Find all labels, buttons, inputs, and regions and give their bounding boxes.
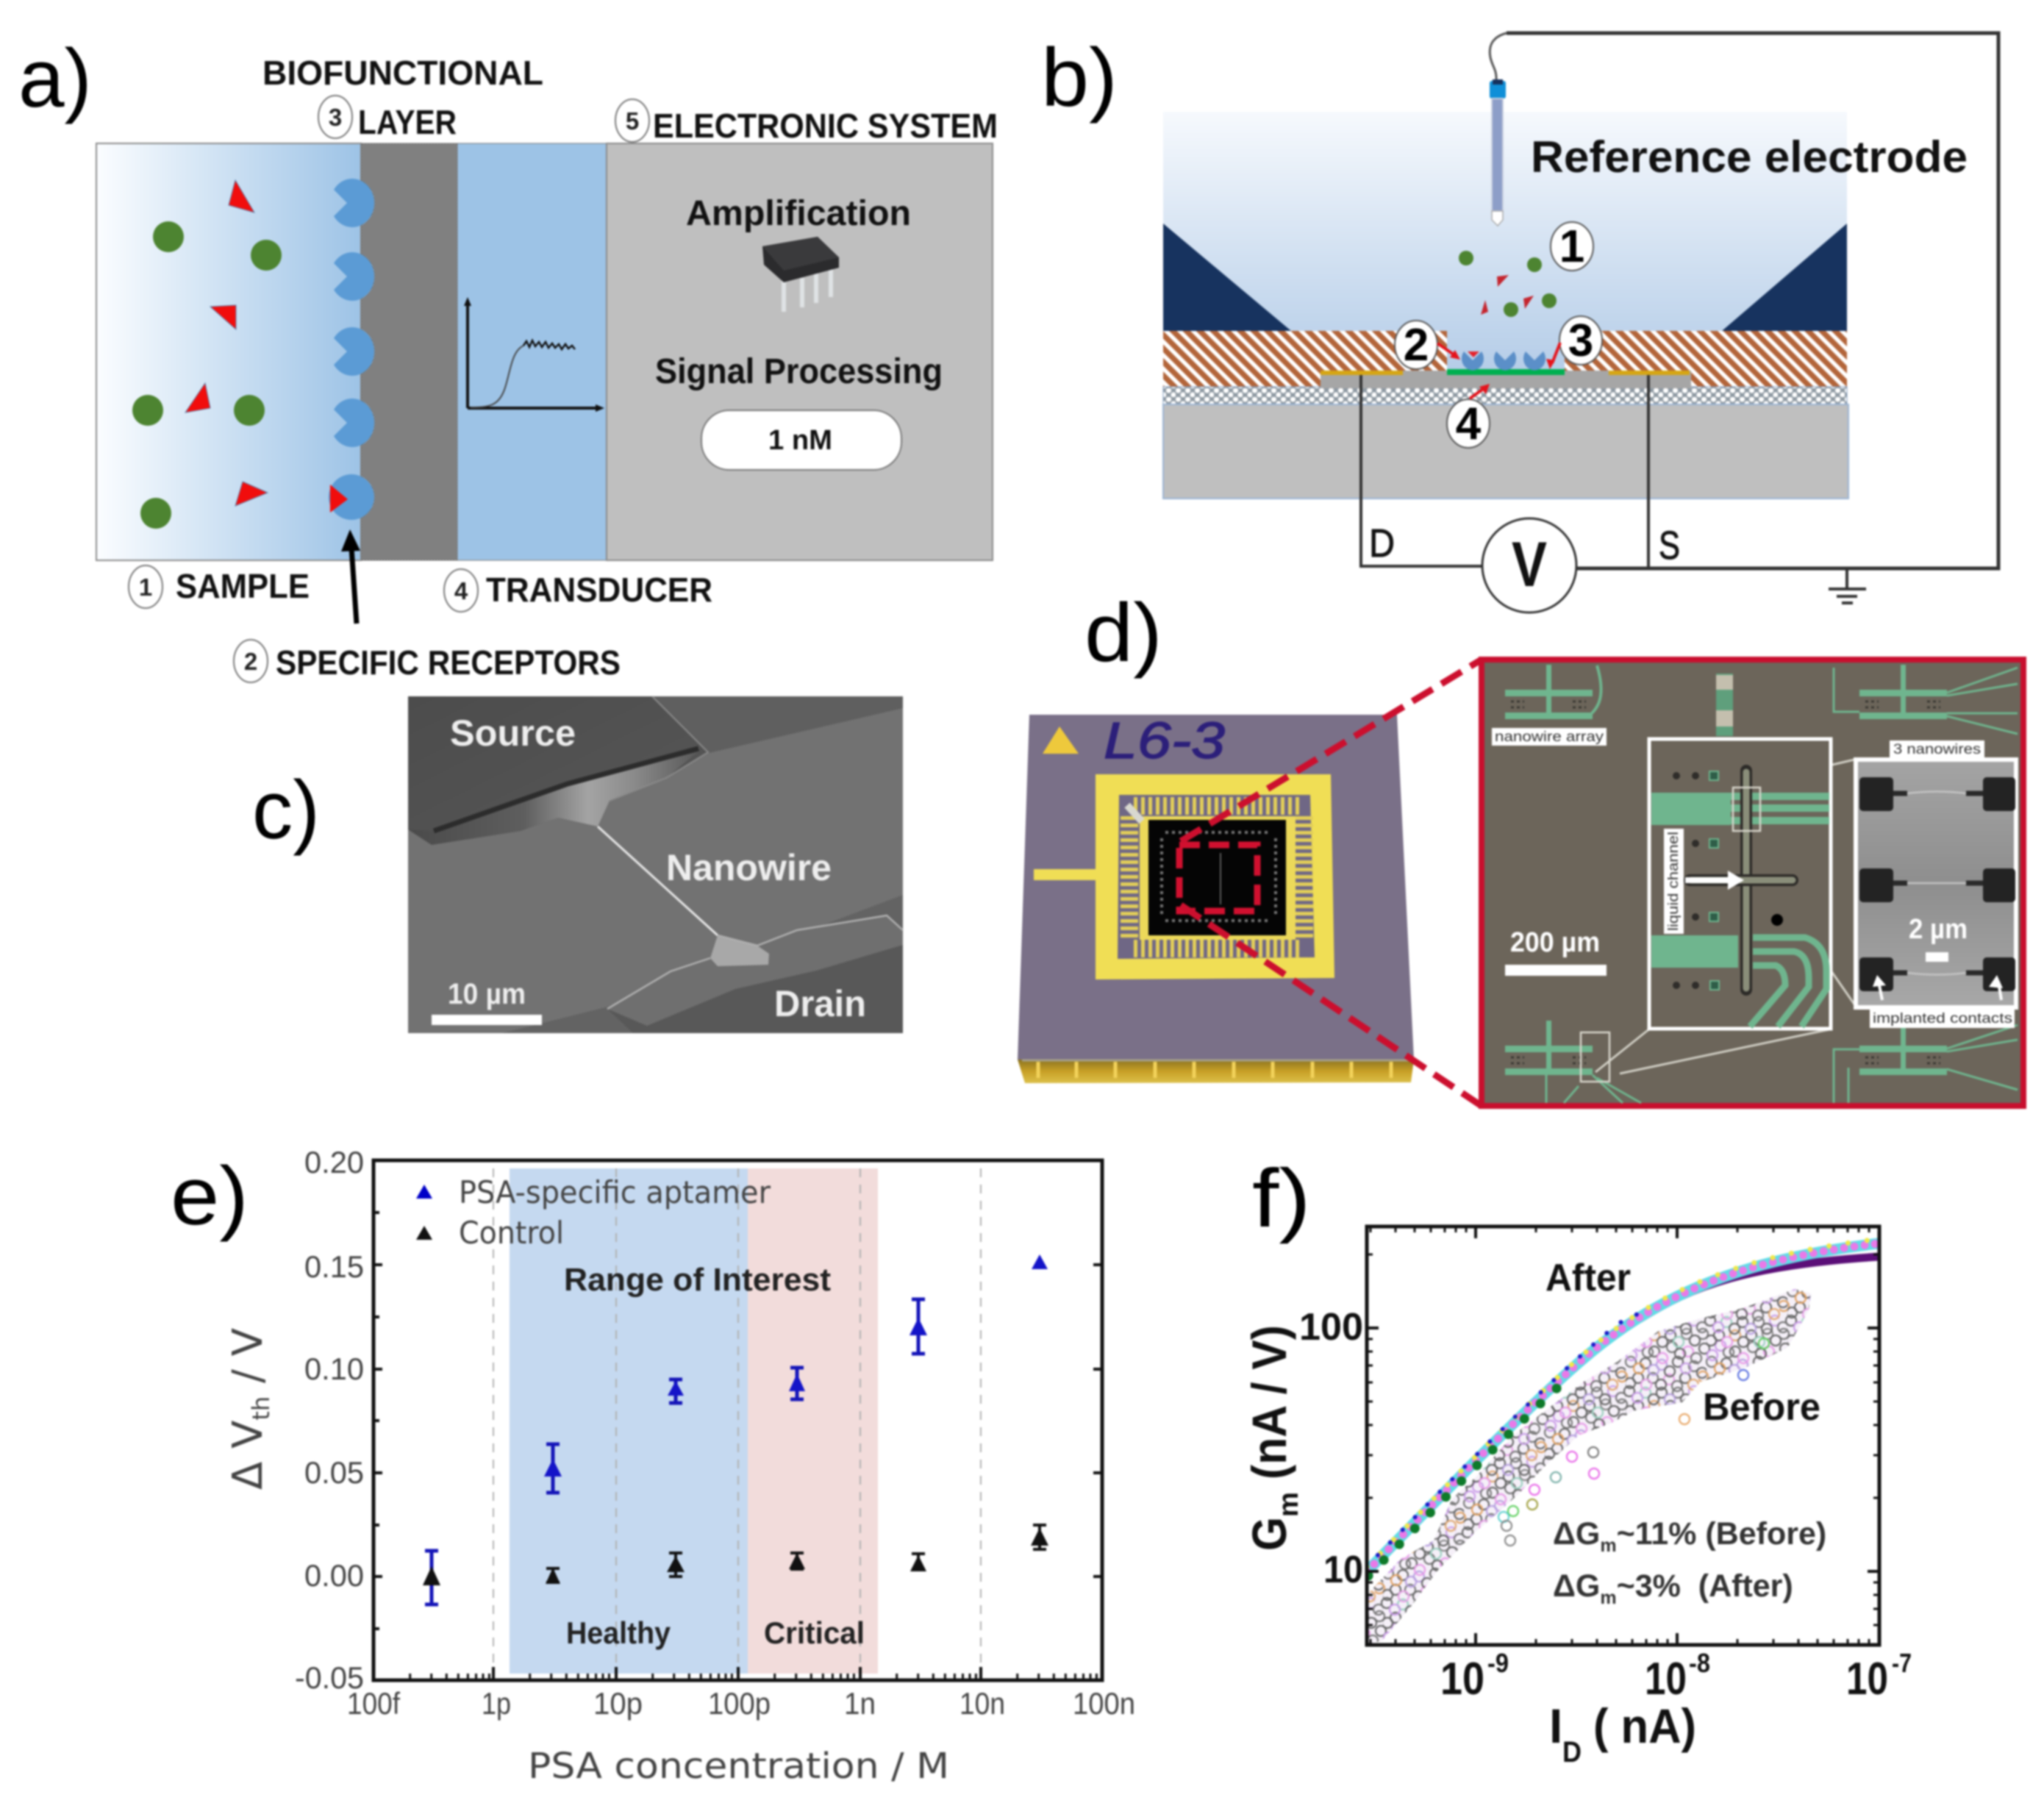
y axis title: m bbox=[1273, 1492, 1304, 1517]
liquid volume bbox=[1163, 112, 1847, 371]
x tick labels: 10 bbox=[1440, 1654, 1484, 1704]
label: sample: 1 bbox=[139, 574, 152, 601]
legend bbox=[416, 1174, 771, 1251]
x axis title: ( nA) bbox=[1593, 1699, 1696, 1753]
silicon substrate bbox=[1163, 404, 1848, 499]
top contact strip bbox=[1716, 674, 1733, 736]
series: PSA-specific aptamer bbox=[425, 1254, 1048, 1604]
series: control bbox=[423, 1525, 1048, 1585]
y tick labels: 10 bbox=[1323, 1549, 1363, 1591]
enlarged channel box bbox=[1649, 739, 1831, 1029]
label: 3 nanowires: 3 nanowires bbox=[1893, 742, 1981, 757]
red target analytes bbox=[185, 180, 268, 506]
annotation: gm after: ~3% (After) bbox=[1617, 1568, 1793, 1604]
terminal label: D: D bbox=[1369, 521, 1395, 565]
label: sample: SAMPLE bbox=[176, 567, 310, 605]
panel: c) SEM image bbox=[252, 696, 903, 1033]
x tick labels: 100f bbox=[347, 1686, 400, 1721]
label: biofunctional layer: BIOFUNCTIONAL bbox=[262, 54, 543, 92]
y tick labels: 100 bbox=[1299, 1306, 1363, 1349]
readout pill: 1 nM: 1 nM bbox=[768, 425, 832, 456]
handwritten marking: L6-3 bbox=[1104, 712, 1225, 769]
nanowire inset bbox=[1856, 760, 2016, 1007]
red dashed region on chip bbox=[1179, 845, 1257, 911]
red pointer arrows bbox=[1437, 343, 1560, 399]
chip package bbox=[1018, 715, 1414, 1083]
label: liquid channel bbox=[1664, 829, 1684, 934]
zoom guide lines bbox=[1595, 760, 1857, 1074]
label: electronic system: ELECTRONIC SYSTEM bbox=[653, 107, 998, 145]
panel: b) device cross-section bbox=[1041, 32, 1998, 613]
green sensing film bbox=[1447, 369, 1565, 375]
micrograph labels: Nanowire bbox=[666, 847, 832, 888]
micrograph labels: Drain bbox=[774, 983, 866, 1024]
panel: f) transconductance chart bbox=[1242, 1152, 1912, 1768]
green particles bbox=[132, 221, 282, 529]
text: signal processing: Signal Processing bbox=[655, 352, 943, 391]
x tick labels: 10 bbox=[1846, 1654, 1888, 1704]
annotation: critical: Critical bbox=[764, 1615, 865, 1650]
critical range band bbox=[748, 1168, 878, 1674]
annotation: gm before: ~11% (Before) bbox=[1617, 1516, 1826, 1552]
label: specific receptors: 2 bbox=[244, 648, 257, 675]
heading: d): d) bbox=[1084, 587, 1162, 679]
numbered callouts: 1 bbox=[1559, 221, 1584, 272]
numbered callouts bbox=[1395, 221, 1602, 449]
specific receptors bbox=[329, 179, 374, 520]
scale text: 200 µm bbox=[1505, 927, 1607, 976]
legend: Control bbox=[459, 1215, 564, 1251]
voltmeter bbox=[1482, 518, 1576, 613]
numbered callouts: 2 bbox=[1404, 320, 1429, 371]
label: biofunctional layer bbox=[262, 54, 543, 141]
left reservoir wall bbox=[1163, 224, 1291, 331]
label: sample bbox=[129, 565, 310, 608]
y tick labels: 0.15 bbox=[304, 1249, 364, 1284]
x tick labels: 100p bbox=[708, 1686, 771, 1721]
micrograph labels bbox=[448, 713, 866, 1024]
label: implanted contacts bbox=[1870, 1009, 2015, 1028]
annotation: gm after: ΔG bbox=[1553, 1568, 1600, 1604]
label: nanowire array: nanowire array bbox=[1495, 729, 1604, 745]
small marker box bbox=[1581, 1032, 1609, 1082]
scale text: 2 µm bbox=[1909, 914, 1968, 962]
legend: PSA-specific aptamer bbox=[459, 1174, 771, 1210]
x tick labels: 10p bbox=[593, 1686, 643, 1721]
x tick labels: -8 bbox=[1689, 1648, 1710, 1678]
y axis title: G bbox=[1242, 1517, 1296, 1551]
y tick labels: 0.00 bbox=[304, 1558, 364, 1593]
scale text: 2 µm: 2 µm bbox=[1909, 914, 1968, 945]
x tick labels: -7 bbox=[1892, 1648, 1912, 1678]
annotation: healthy: Healthy bbox=[566, 1615, 671, 1650]
y axis title: / V bbox=[224, 1328, 272, 1396]
corner device: top left bbox=[1505, 665, 1601, 719]
mini receptors bbox=[1462, 351, 1545, 371]
circuit wiring bbox=[1361, 33, 1998, 568]
corner device: bottom right bbox=[1834, 1021, 2018, 1103]
corner device: top right bbox=[1834, 665, 2018, 734]
decade grid lines bbox=[493, 1168, 981, 1677]
x axis title bbox=[1549, 1699, 1696, 1768]
terminal label: S: S bbox=[1659, 524, 1680, 568]
SEM micrograph bbox=[408, 696, 903, 1033]
heading: c): c) bbox=[252, 764, 320, 856]
heading: b): b) bbox=[1041, 32, 1118, 124]
y tick labels: -0.05 bbox=[295, 1660, 364, 1695]
panel: a) biosensor schematic bbox=[18, 32, 998, 682]
icon: op-amp chip bbox=[762, 237, 839, 312]
x tick labels: 10n bbox=[960, 1686, 1005, 1721]
annotation: before: Before bbox=[1703, 1386, 1820, 1429]
y axis title: th bbox=[247, 1396, 275, 1421]
text: amplification: Amplification bbox=[686, 194, 911, 233]
gold contacts bbox=[1321, 371, 1690, 375]
y tick labels: 0.05 bbox=[304, 1455, 364, 1490]
label: transducer: 4 bbox=[454, 577, 468, 604]
x axis title: D bbox=[1562, 1736, 1582, 1768]
micrograph labels: Source bbox=[450, 713, 576, 754]
particles in liquid bbox=[1459, 251, 1557, 317]
label: specific receptors: SPECIFIC RECEPTORS bbox=[276, 643, 621, 682]
plot frame bbox=[1367, 1227, 1879, 1645]
corner device: bottom left bbox=[1505, 1021, 1641, 1103]
y tick labels bbox=[295, 1145, 364, 1695]
icon: ground bbox=[1829, 568, 1866, 603]
label: biofunctional layer: LAYER bbox=[358, 103, 457, 141]
transducer block bbox=[457, 143, 607, 560]
label: implanted contacts: implanted contacts bbox=[1873, 1011, 2012, 1027]
label: liquid channel: liquid channel bbox=[1666, 832, 1682, 931]
numbered callouts: 4 bbox=[1456, 399, 1482, 449]
axis ticks bbox=[1367, 1227, 1879, 1645]
panel: e) threshold shift chart bbox=[171, 1145, 1135, 1787]
y axis title: (nA / V) bbox=[1242, 1325, 1296, 1479]
zoom lines bbox=[1181, 660, 1482, 1106]
right reservoir wall bbox=[1722, 224, 1847, 331]
x tick labels: 1n bbox=[844, 1686, 876, 1721]
y tick labels: 0.20 bbox=[304, 1145, 364, 1179]
arrow to receptors bbox=[341, 529, 360, 624]
y tick labels bbox=[1299, 1306, 1363, 1591]
text: reference electrode: Reference electrode bbox=[1531, 132, 1968, 182]
micrograph contents bbox=[1492, 665, 2018, 1103]
sample region bbox=[96, 143, 361, 560]
micrograph labels: 10 µm bbox=[448, 978, 526, 1010]
x tick labels: 1p bbox=[482, 1686, 511, 1721]
y axis title: Δ V bbox=[224, 1421, 272, 1490]
scale text: 200 µm: 200 µm bbox=[1510, 927, 1600, 958]
voltmeter: V bbox=[1512, 529, 1547, 600]
panel: d) chip and micrograph bbox=[1018, 587, 2023, 1106]
nanowire platform bbox=[1321, 371, 1691, 388]
axis ticks bbox=[374, 1213, 1102, 1680]
x tick labels: -9 bbox=[1487, 1648, 1509, 1678]
x tick labels: 10 bbox=[1645, 1654, 1687, 1704]
numbered callouts: 3 bbox=[1568, 315, 1593, 366]
y axis title bbox=[1242, 1325, 1304, 1551]
plot frame bbox=[374, 1160, 1102, 1680]
x axis title: PSA concentration / M bbox=[528, 1746, 949, 1787]
heading: f): f) bbox=[1252, 1152, 1311, 1244]
annotation: gm before: ΔG bbox=[1553, 1516, 1600, 1552]
annotation: after: After bbox=[1545, 1257, 1631, 1299]
heading: a): a) bbox=[18, 32, 92, 124]
label: biofunctional layer: 3 bbox=[329, 104, 342, 131]
x axis title: I bbox=[1549, 1699, 1562, 1753]
porous oxide layer bbox=[1163, 387, 1847, 404]
plot: before data scatter bbox=[1367, 1289, 1811, 1645]
biofunctional layer block bbox=[361, 143, 457, 560]
label: electronic system: 5 bbox=[626, 107, 639, 135]
healthy range band bbox=[510, 1168, 748, 1674]
x tick labels bbox=[1440, 1648, 1912, 1704]
electronic system block bbox=[607, 143, 993, 560]
plot: after data curve bbox=[1365, 1239, 1879, 1576]
annotation: gm after: m bbox=[1600, 1588, 1617, 1608]
y tick labels: 0.10 bbox=[304, 1352, 364, 1386]
scale bar bbox=[432, 1015, 542, 1025]
reference electrode bbox=[1490, 33, 1507, 226]
x tick labels: 100n bbox=[1073, 1686, 1135, 1721]
label: transducer: TRANSDUCER bbox=[486, 571, 712, 609]
annotation: range of interest: Range of Interest bbox=[564, 1262, 831, 1298]
heading: e): e) bbox=[171, 1150, 249, 1242]
annotation: gm before: m bbox=[1600, 1535, 1617, 1556]
x tick labels bbox=[347, 1686, 1135, 1721]
transducer signal graph bbox=[464, 297, 604, 412]
readout pill: 1 nM bbox=[701, 410, 901, 470]
passivation layers bbox=[1163, 331, 1847, 387]
micrograph frame bbox=[1482, 660, 2023, 1106]
